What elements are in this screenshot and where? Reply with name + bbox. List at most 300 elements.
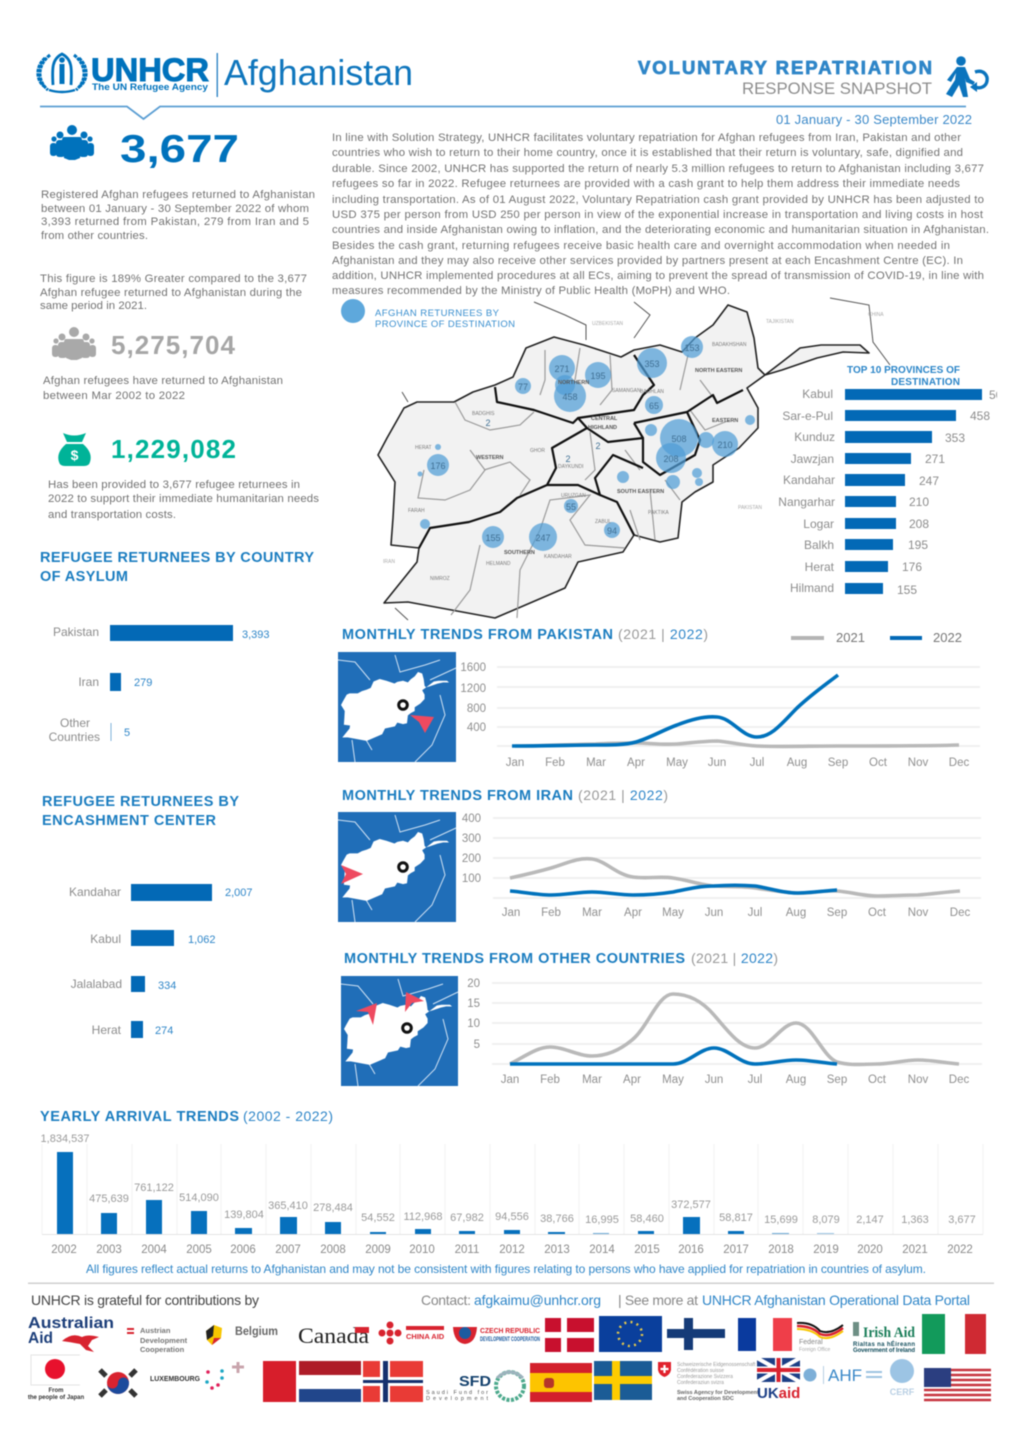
month labels: Aug (786, 1074, 806, 1086)
year labels: 2013 (544, 1244, 570, 1256)
text block: intro paragraph: countries who wish to return to their home country, once it is established that their return is voluntary, safe, dignified and (332, 147, 963, 159)
value labels: 15,699 (764, 1214, 798, 1226)
UNHCR wordmark: UNHCR (91, 52, 209, 88)
values (898, 390, 998, 595)
text block: intro paragraph: measures recommended by the Ministry of Public Health (MoPH) and WHO. (332, 285, 730, 297)
month labels: Feb (545, 757, 565, 769)
month labels: Mar (582, 907, 602, 919)
bar chart: returnees by encashment center: Kandahar (69, 885, 121, 899)
province labels: Nangarhar (778, 495, 835, 509)
year labels: 2014 (589, 1244, 615, 1256)
heading: monthly trends Pakistan: MONTHLY TRENDS FROM PAKISTAN (342, 627, 613, 643)
region labels: DAYKUNDI (558, 464, 583, 470)
icon: money bag (58, 433, 91, 466)
month labels: Jan (506, 757, 524, 769)
bubble values: 65 (649, 401, 659, 411)
value labels: 372,577 (671, 1199, 711, 1211)
bubble values: 271 (554, 364, 570, 374)
region labels: HIGHLAND (588, 425, 617, 431)
logo: Korea (100, 1370, 136, 1396)
heading: monthly trends Iran (342, 787, 668, 804)
region labels: NORTHERN (558, 380, 589, 386)
chart legend: 2021 (836, 630, 865, 645)
month labels: Apr (624, 907, 642, 919)
value labels: 94,556 (495, 1211, 529, 1223)
flag: United States (924, 1368, 991, 1402)
y axis labels: 300 (462, 833, 481, 845)
logo: Switzerland: Confédération suisse (677, 1368, 724, 1374)
text block: intro paragraph: countries and inside Afghanistan owing to inflation, and the deteriorating economic and humanitarian situation in Afghanistan. (332, 224, 989, 236)
value labels: 1,363 (901, 1214, 929, 1226)
month labels: Jul (750, 757, 764, 769)
text block: comparison with 2021: same period in 2021. (40, 300, 147, 312)
y axis labels: 5 (474, 1039, 480, 1051)
heading: returnees by encashment center: ENCASHMENT CENTER (42, 813, 217, 829)
values: 208 (909, 517, 929, 531)
region labels: HELMAND (486, 561, 511, 567)
heading: monthly trends other countries: (2021 | 2022) (691, 950, 778, 966)
bar chart: returnees by country of asylum: 279 (134, 677, 152, 689)
text block: cash grant (48, 479, 319, 521)
locator map: other countries (341, 976, 458, 1086)
contact line: | See more at (618, 1292, 698, 1308)
value labels: 3,677 (948, 1214, 976, 1226)
heading: monthly trends Pakistan (342, 626, 708, 643)
y axis labels (460, 662, 486, 734)
chart: top 10 provinces of destination (778, 365, 1009, 597)
contact line: Contact: (421, 1292, 471, 1308)
heading: returnees by encashment center: REFUGEE RETURNEES BY (42, 794, 239, 810)
neighbouring borders (395, 298, 890, 620)
text block: intro paragraph: durable. Since 2002, UNHCR has supported the return of nearly 5.3 million refugees to return to Afghanistan including 3,677 (332, 163, 984, 175)
bubble values: 155 (485, 533, 501, 543)
icon: people group (50, 125, 94, 160)
year labels (51, 1244, 973, 1256)
y axis labels: 20 (467, 978, 480, 990)
month labels: Jun (708, 757, 726, 769)
year labels: 2006 (230, 1244, 256, 1256)
province labels: Kabul (802, 387, 833, 401)
y axis labels: 1200 (460, 683, 486, 695)
year labels: 2004 (141, 1244, 167, 1256)
year labels: 2020 (857, 1244, 883, 1256)
neighbouring country labels: IRAN (383, 559, 395, 565)
y axis labels: 200 (462, 853, 481, 865)
text block: intro paragraph: including transportation. As of 01 August 2022, Voluntary Repatriation cash grant provided by UNHCR has been adjusted to (332, 194, 984, 206)
bar chart: returnees by country of asylum: Countries (49, 730, 100, 744)
month labels: Apr (627, 757, 645, 769)
2022 line (512, 675, 838, 746)
contact line (421, 1292, 970, 1308)
flag: Finland (667, 1318, 725, 1350)
bubble values: 77 (518, 382, 528, 392)
logo: Germany (797, 1323, 843, 1353)
map legend: AFGHAN RETURNEES BY (375, 308, 500, 319)
text block: intro paragraph: addition, UNHCR implemented procedures at all ECs, aiming to prevent the spread of transmission of COVID-19, in line with (332, 270, 984, 282)
logo: Australian Aid: Aid (28, 1330, 53, 1347)
region labels: SAMANGAN (612, 388, 641, 394)
logo: Irish Aid: Irish Aid (863, 1325, 916, 1341)
bubble values: 2 (565, 454, 571, 464)
month labels: Dec (949, 1074, 969, 1086)
logo: Belgium: Belgium (235, 1324, 278, 1338)
y axis labels: 800 (467, 703, 486, 715)
grid (493, 818, 981, 898)
bars (57, 1152, 834, 1234)
logo: SFD: Development (426, 1396, 488, 1402)
province labels: Balkh (804, 538, 834, 552)
value labels: 38,766 (540, 1213, 574, 1225)
icon: walking person with return arrow (946, 56, 987, 97)
heading: monthly trends Iran: MONTHLY TRENDS FROM IRAN (342, 788, 573, 804)
month labels: Nov (908, 907, 928, 919)
text block: intro paragraph: refugees so far in 2022. Refugee returnees are provided with a cash grant to help them address their immediate needs (332, 178, 960, 190)
map: returnees by province (378, 298, 890, 620)
y axis labels: 400 (462, 813, 481, 825)
line chart: monthly trends other countries (467, 978, 982, 1086)
logo: China Aid (378, 1322, 445, 1344)
month labels: Jun (705, 907, 723, 919)
year labels: 2015 (634, 1244, 660, 1256)
text block: intro paragraph: Besides the cash grant, returning refugees receive basic health care and overnight accommodation when needed in (332, 240, 950, 252)
bubble values: 195 (590, 371, 606, 381)
bar chart: returnees by country of asylum: Pakistan (53, 625, 99, 639)
year labels: 2019 (813, 1244, 839, 1256)
province labels: Kunduz (794, 430, 835, 444)
value labels: 58,817 (719, 1212, 753, 1224)
region labels: BADGHIS (472, 411, 495, 417)
value labels: 54,552 (361, 1212, 395, 1224)
bar chart: returnees by encashment center: 274 (155, 1025, 173, 1037)
flag: France (738, 1318, 792, 1351)
logo: Austrian Development Cooperation: Development (140, 1336, 188, 1345)
text block: comparison with 2021: Afghan refugee returned to Afghanistan during the (40, 287, 302, 299)
2022 line (510, 1048, 837, 1064)
logo: Austrian Development Cooperation: Cooperation (140, 1345, 185, 1354)
month labels: Feb (540, 1074, 560, 1086)
month labels: May (662, 1074, 684, 1086)
values: 247 (919, 474, 939, 488)
logo: Austrian Development Cooperation (127, 1326, 188, 1354)
logo: Belgium (206, 1324, 278, 1345)
province labels: Jawzjan (791, 452, 834, 466)
year labels: 2011 (455, 1244, 479, 1256)
month labels: May (666, 757, 688, 769)
grid (42, 1144, 983, 1234)
month labels: Nov (908, 757, 928, 769)
y axis labels: 1600 (460, 662, 486, 674)
region labels: BADAKHSHAN (712, 342, 747, 348)
neighbouring country labels: UZBEKISTAN (592, 321, 623, 327)
logo: Czech Republic (453, 1326, 541, 1344)
y axis labels (462, 813, 481, 885)
header: UNHCR logo and country title (38, 52, 413, 97)
bubble values: 458 (562, 392, 578, 402)
bubble values: 55 (566, 502, 576, 512)
flag: Sweden (594, 1361, 652, 1400)
line chart: monthly trends Pakistan (460, 662, 980, 769)
2022 line (510, 885, 837, 895)
flag: Netherlands (299, 1361, 361, 1402)
heading: monthly trends other countries: MONTHLY TRENDS FROM OTHER COUNTRIES (344, 951, 685, 967)
month labels: Apr (623, 1074, 641, 1086)
values: 176 (902, 560, 922, 574)
heading: yearly arrival trends: YEARLY ARRIVAL TRENDS (40, 1109, 239, 1125)
year labels: 2009 (365, 1244, 391, 1256)
logo: AHF: AHF (828, 1366, 862, 1385)
value labels: 761,122 (134, 1182, 174, 1194)
icon: money bag: $ (71, 447, 79, 463)
text block: registered returnees: 3,393 returned from Pakistan, 279 from Iran and 5 (41, 216, 309, 228)
bar chart: returnees by encashment center: Jalalabad (71, 977, 122, 991)
logo: China Aid: CHINA AID (406, 1332, 445, 1341)
month labels: Sep (827, 907, 847, 919)
chart legend (791, 630, 962, 645)
flag: Spain (530, 1363, 592, 1402)
text block: intro paragraph: In line with Solution Strategy, UNHCR facilitates voluntary repatriation for Afghan refugees from Iran, Pakistan and other (332, 132, 961, 144)
values: 271 (925, 452, 945, 466)
year labels: 2008 (320, 1244, 346, 1256)
text block: comparison with 2021 (40, 273, 307, 312)
bubble values: 176 (430, 461, 446, 471)
country title: Afghanistan (224, 52, 413, 93)
chart title: TOP 10 PROVINCES OF (847, 365, 960, 376)
text block: returns since 2002: Afghan refugees have returned to Afghanistan (43, 375, 283, 387)
heading: returnees by encashment center (42, 794, 239, 829)
heading: yearly arrival trends (40, 1108, 333, 1125)
text block: returns since 2002: between Mar 2002 to 2022 (43, 390, 185, 402)
year labels: 2007 (275, 1244, 301, 1256)
month labels: Mar (582, 1074, 602, 1086)
year labels: 2018 (768, 1244, 794, 1256)
contact line: afgkaimu@unhcr.org (474, 1292, 601, 1308)
logo: SFD: Saudi Fund for (426, 1390, 488, 1396)
province labels: Sar-e-Pul (782, 409, 833, 423)
map legend (341, 299, 515, 330)
value labels: 475,639 (89, 1193, 129, 1205)
logo: UK aid (757, 1358, 800, 1402)
bar chart: returnees by encashment center: 2,007 (225, 887, 253, 899)
text block: intro paragraph: Afghanistan and they may also receive other services provided by partners present at each Encashment Centre (EC). In (332, 255, 963, 267)
region labels: SOUTHERN (504, 550, 535, 556)
bar chart: yearly arrivals (41, 1133, 983, 1256)
locator map: Iran (338, 812, 456, 922)
value labels (41, 1133, 976, 1226)
region labels: NIMROZ (430, 576, 450, 582)
neighbouring country labels (383, 312, 884, 565)
value labels: 58,460 (630, 1213, 664, 1225)
text block: registered returnees: Registered Afghan refugees returned to Afghanistan (41, 189, 315, 201)
month labels: Jan (502, 907, 520, 919)
logo: Luxembourg: LUXEMBOURG (150, 1374, 200, 1383)
value labels: 278,484 (313, 1202, 353, 1214)
province labels (778, 387, 835, 595)
text block: intro paragraph: USD 375 per person from USD 250 per person in view of the exponential increase in transportation and living costs in host (332, 209, 984, 221)
flag: Denmark (545, 1318, 594, 1352)
region labels: FARAH (408, 508, 425, 514)
month labels: Feb (541, 907, 561, 919)
logo: Irish Aid (853, 1322, 916, 1354)
province labels: Kandahar (783, 473, 835, 487)
logo: Australian Aid: Australian (28, 1315, 114, 1332)
values: 210 (909, 495, 929, 509)
heading: returnees by country of asylum (40, 550, 314, 585)
bar chart: returnees by country of asylum (49, 625, 270, 744)
month labels: Nov (908, 1074, 928, 1086)
grid (497, 667, 980, 746)
region labels: KANDAHAR (544, 554, 572, 560)
logo: UK aid: UKaid (757, 1385, 800, 1402)
flag: Italy (922, 1314, 986, 1354)
y axis labels: 400 (467, 722, 486, 734)
year labels: 2003 (96, 1244, 122, 1256)
map legend: PROVINCE OF DESTINATION (375, 319, 515, 330)
value labels: 16,995 (585, 1214, 619, 1226)
logo: AHF (804, 1366, 882, 1385)
bubble values: 210 (717, 440, 733, 450)
chart: top 10 provinces of destination: DESTINATION (891, 377, 960, 388)
month labels: Sep (827, 1074, 847, 1086)
text block: comparison with 2021: This figure is 189% Greater compared to the 3,677 (40, 273, 307, 285)
text block: registered returnees: between 01 January - 30 September 2022 of whom (41, 203, 309, 215)
bar chart: returnees by country of asylum: Iran (78, 675, 99, 689)
chart legend: 2022 (933, 630, 962, 645)
value labels: 112,968 (404, 1211, 442, 1223)
date range: 01 January - 30 September 2022 (776, 112, 972, 127)
logo: Switzerland: Confederazione Svizzera (677, 1374, 733, 1380)
values: 155 (897, 583, 917, 597)
logo: Switzerland: Confederaziun svizra (677, 1380, 724, 1386)
text block: cash grant: Has been provided to 3,677 refugee returnees in (48, 479, 300, 491)
region boundaries (419, 355, 743, 548)
neighbouring country labels: PAKISTAN (738, 505, 762, 511)
country outline (378, 305, 869, 618)
grid (492, 983, 982, 1064)
province labels: Herat (805, 560, 835, 574)
values: 353 (945, 431, 965, 445)
bar chart: returnees by encashment center: Kabul (90, 932, 121, 946)
logo: Luxembourg (150, 1362, 244, 1390)
value labels: 8,079 (812, 1214, 840, 1226)
y axis labels: 15 (467, 998, 480, 1010)
flag: European Union (599, 1316, 662, 1352)
region labels: CENTRAL (591, 416, 618, 422)
donors heading: UNHCR is grateful for contributions by (31, 1292, 259, 1308)
month labels (501, 1074, 969, 1086)
logo: Switzerland: Swiss Agency for Development (677, 1390, 759, 1396)
report title line 1: VOLUNTARY REPATRIATION (638, 57, 932, 78)
province bubbles (418, 336, 755, 551)
province boundaries (418, 348, 730, 618)
logo: Germany: Foreign Office (799, 1347, 831, 1353)
y axis labels: 100 (462, 873, 481, 885)
month labels: Aug (787, 757, 807, 769)
region labels (408, 342, 747, 582)
logo: SFD (426, 1372, 524, 1402)
month labels: Jul (748, 907, 762, 919)
heading: monthly trends Iran: (2021 | 2022) (578, 787, 668, 803)
line chart: monthly trends Iran (462, 813, 981, 919)
icon: grey people group (52, 327, 96, 360)
divider (28, 1282, 994, 1284)
year labels: 2016 (678, 1244, 704, 1256)
icon: UNHCR emblem (38, 54, 86, 92)
region labels: PAKTIKA (648, 510, 669, 516)
text block: cash grant: 2022 to support their immediate humanitarian needs (48, 493, 319, 505)
month labels: Jul (748, 1074, 762, 1086)
neighbouring country labels: CHINA (868, 312, 884, 318)
region labels: NORTH EASTERN (695, 368, 742, 374)
value labels: 2,147 (856, 1214, 884, 1226)
key figure: total returnees since 2002: 5,275,704 (111, 330, 236, 360)
region labels: EASTERN (712, 418, 738, 424)
heading: yearly arrival trends: (2002 - 2022) (243, 1108, 333, 1124)
text block: registered returnees (41, 189, 315, 242)
logo: Australian Aid (28, 1315, 114, 1352)
region labels: WESTERN (476, 455, 504, 461)
bar chart: returnees by encashment center: 334 (158, 980, 176, 992)
value labels: 1,834,537 (41, 1133, 89, 1145)
text block: cash grant: and transportation costs. (48, 509, 176, 521)
logo: Japan: From (48, 1388, 64, 1394)
year labels: 2021 (902, 1244, 928, 1256)
year labels: 2017 (723, 1244, 749, 1256)
header rule with chevron (40, 106, 966, 119)
bubble values: 353 (644, 359, 660, 369)
y axis labels (467, 978, 480, 1051)
UNHCR tagline: The UN Refugee Agency (92, 82, 209, 93)
flag: Norway (363, 1361, 423, 1402)
month labels: Oct (868, 907, 887, 919)
month labels: Oct (868, 1074, 887, 1086)
bar chart: returnees by encashment center: Herat (92, 1023, 122, 1037)
heading: returnees by country of asylum: OF ASYLUM (40, 569, 128, 585)
bubble values: 508 (671, 434, 687, 444)
heading: returnees by country of asylum: REFUGEE RETURNEES BY COUNTRY (40, 550, 314, 566)
logo: CERF (890, 1359, 915, 1397)
flag: Monaco red block (263, 1361, 296, 1402)
province labels: Logar (803, 517, 834, 531)
bar chart: returnees by encashment center: 1,062 (188, 934, 216, 946)
logo: Switzerland: Schweizerische Eidgenossenschaft (677, 1362, 756, 1368)
heading: monthly trends Pakistan: (2021 | 2022) (618, 626, 708, 642)
bubble values: 208 (663, 454, 679, 464)
region labels: HERAT (415, 445, 432, 451)
year labels: 2005 (186, 1244, 212, 1256)
logo: Germany: Federal (799, 1339, 823, 1346)
logo: Japan (28, 1355, 85, 1401)
logo: Irish Aid: Rialtas na hÉireann (853, 1340, 915, 1348)
logo: Czech Republic: CZECH REPUBLIC (480, 1326, 541, 1335)
bar chart: returnees by encashment center (69, 884, 253, 1038)
month labels: Mar (586, 757, 606, 769)
report title line 2: RESPONSE SNAPSHOT (742, 79, 932, 98)
bar chart: returnees by country of asylum: 3,393 (242, 629, 270, 641)
logo: Japan: the people of Japan (28, 1395, 85, 1401)
region labels: SOUTH EASTERN (617, 489, 664, 495)
bubble values: 153 (684, 343, 700, 353)
locator map: Pakistan (338, 652, 456, 762)
logo: Switzerland (658, 1362, 759, 1402)
value labels: 67,982 (450, 1212, 484, 1224)
month labels (506, 757, 969, 769)
month labels: May (662, 907, 684, 919)
region labels: ZABUL (595, 519, 611, 525)
bar chart: returnees by country of asylum: 5 (124, 727, 130, 739)
bubble values: 2 (485, 418, 491, 428)
logo: Irish Aid: Government of Ireland (853, 1348, 915, 1354)
logo: SFD: SFD (459, 1373, 491, 1390)
